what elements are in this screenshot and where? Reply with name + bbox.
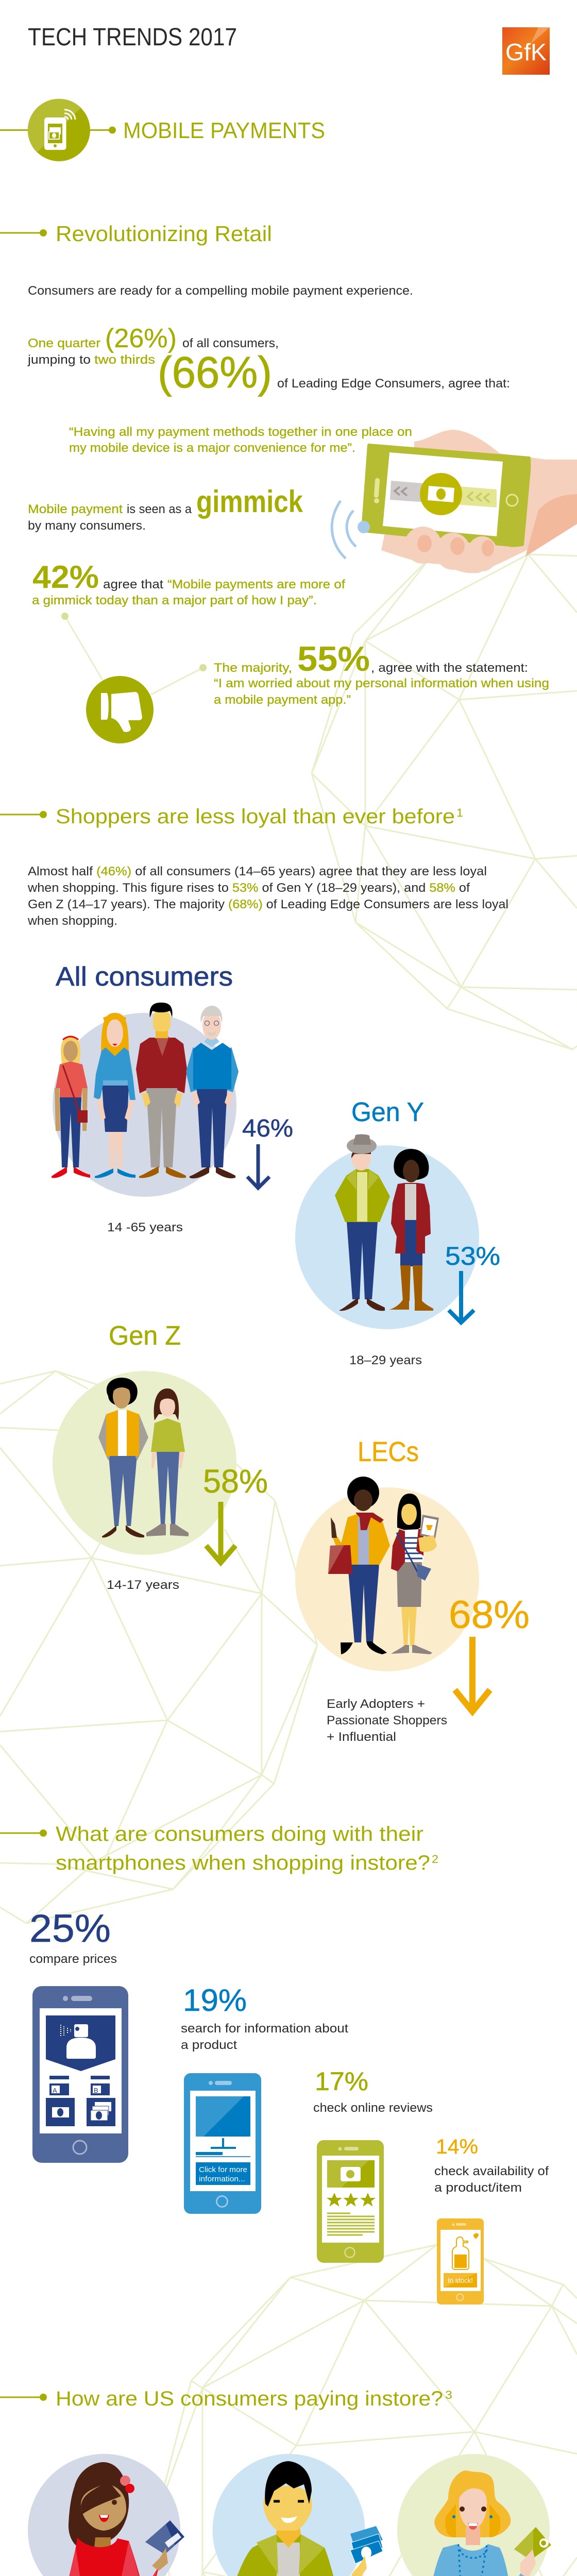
heading: LECs: LECs bbox=[358, 1436, 419, 1467]
panel: credit card payer bbox=[397, 2454, 551, 2576]
stat: 42%: agree that bbox=[103, 578, 163, 591]
logo: GfK bbox=[502, 27, 550, 75]
stat: 55%: , agree with the statement: bbox=[371, 661, 528, 675]
stat: 19% search: search for information about bbox=[181, 2022, 348, 2036]
quote: payment methods convenience: “Having all my payment methods together in one place on bbox=[69, 425, 412, 439]
label: ages: 18–29 years bbox=[349, 1353, 422, 1367]
panel: cash payer bbox=[212, 2454, 383, 2576]
logo: GfK: GfK bbox=[505, 39, 547, 65]
heading: all consumers: All consumers bbox=[56, 962, 233, 992]
heading: how are US consumers paying: 3 bbox=[445, 2388, 452, 2401]
stat: 17% reviews: 17% bbox=[315, 2067, 368, 2096]
label: ages: 14 -65 years bbox=[107, 1221, 183, 1234]
icon: phone comparing prices: A bbox=[53, 2087, 57, 2094]
panel: gen z bbox=[53, 1321, 268, 1592]
text: gimmick: by many consumers. bbox=[28, 519, 146, 533]
paragraph: loyalty bbox=[27, 865, 508, 928]
arrow: 53% bbox=[449, 1271, 474, 1323]
quote: payment methods convenience: my mobile device is a major convenience for me”. bbox=[69, 441, 355, 455]
label: segment definition bbox=[327, 1697, 447, 1744]
paragraph: loyalty: when shopping. This figure rises to 53% of Gen Y (18–29 years), and 58% of bbox=[27, 881, 470, 895]
stat text: 26% and 66% bbox=[27, 324, 510, 397]
stat: 14% availability: 14% bbox=[436, 2136, 478, 2158]
icon: phone comparing prices bbox=[32, 1986, 128, 2163]
figure: woman with phone bbox=[391, 1494, 439, 1654]
stat: 25% compare prices: 25% bbox=[29, 1907, 111, 1951]
figure: woman with long hair bbox=[94, 1013, 135, 1178]
heading: gen z: Gen Z bbox=[109, 1321, 181, 1351]
stat: 53%: 53% bbox=[445, 1242, 500, 1270]
stat: 14% availability: check availability of bbox=[434, 2164, 549, 2178]
icon: thumbs down with connectors bbox=[61, 613, 207, 743]
figure: girl in green top bbox=[146, 1388, 189, 1536]
label: segment definition: Passionate Shoppers bbox=[327, 1714, 447, 1727]
icon: signal waves and blue dot bbox=[332, 501, 370, 558]
heading: how are US consumers paying: How are US consumers paying instore? bbox=[56, 2387, 443, 2410]
quote: payment methods convenience bbox=[69, 425, 412, 455]
stat: 14% availability: a product/item bbox=[434, 2181, 522, 2195]
stat: 55% bbox=[214, 639, 549, 707]
heading: smartphones instore: What are consumers doing with their bbox=[56, 1823, 423, 1845]
label: segment definition: Early Adopters + bbox=[327, 1697, 425, 1711]
stat: 55%: 55% bbox=[297, 639, 370, 679]
icon: phone comparing prices: B bbox=[94, 2087, 98, 2094]
figure: woman in red cardigan bbox=[389, 1149, 433, 1311]
heading: shoppers less loyal: 1 bbox=[456, 806, 463, 819]
icon: phone with reviews bbox=[317, 2140, 384, 2263]
text: gimmick: is seen as a bbox=[127, 502, 192, 516]
arrow: 68% bbox=[455, 1637, 490, 1711]
stat: 14% availability bbox=[434, 2136, 549, 2195]
icon: mobile payments phone bbox=[0, 99, 116, 161]
panel: debit card payer bbox=[28, 2454, 184, 2576]
heading: smartphones instore bbox=[0, 1823, 438, 1874]
stat: 68%: 68% bbox=[449, 1593, 530, 1637]
stat: 42%: 42% bbox=[32, 560, 99, 595]
icon: phone with product info: Click for more bbox=[199, 2165, 247, 2174]
paragraph: loyalty: Almost half (46%) of all consumers (14–65 years) agree that they are less loyal bbox=[28, 865, 487, 878]
figure: woman with debit card bbox=[63, 2462, 184, 2576]
paragraph: loyalty: Gen Z (14–17 years). The majority (68%) of Leading Edge Consumers are less loyal bbox=[28, 897, 508, 911]
stat: 42%: “Mobile payments are more of bbox=[167, 578, 345, 591]
stat: 55%: The majority, bbox=[214, 661, 292, 675]
heading: revolutionizing retail: Revolutionizing Retail bbox=[56, 222, 272, 246]
panel: gen y bbox=[295, 1097, 500, 1367]
illustration: hand holding phone bbox=[363, 430, 577, 573]
stat: 55%: a mobile payment app.” bbox=[214, 693, 351, 707]
panel: leading edge consumers bbox=[295, 1436, 530, 1744]
heading: shoppers less loyal: Shoppers are less loyal than ever before bbox=[56, 805, 455, 828]
stat: 19% search: a product bbox=[181, 2038, 237, 2052]
stat: 58%: 58% bbox=[203, 1463, 268, 1500]
stat text: 26% and 66%: (26%) bbox=[105, 324, 177, 353]
heading: smartphones instore: 2 bbox=[432, 1853, 438, 1866]
figure: man with hat bbox=[335, 1134, 390, 1311]
stat text: 26% and 66%: of all consumers, bbox=[182, 336, 279, 350]
paragraph: loyalty: when shopping. bbox=[27, 914, 117, 928]
stat text: 26% and 66%: (66%) bbox=[158, 348, 272, 397]
stat: 19% search bbox=[181, 1983, 348, 2052]
figure: woman with credit card bbox=[427, 2470, 551, 2576]
figure: girl bbox=[52, 1036, 90, 1178]
arrow: 46% bbox=[247, 1144, 269, 1188]
heading: smartphones instore: smartphones when shopping instore? bbox=[56, 1852, 430, 1874]
figure: man with cash bbox=[232, 2461, 383, 2576]
label: segment definition: + Influential bbox=[327, 1730, 396, 1744]
stat: 25% compare prices: compare prices bbox=[29, 1952, 117, 1966]
text: gimmick: Mobile payment bbox=[28, 502, 123, 516]
stat: 17% reviews bbox=[313, 2067, 433, 2115]
stat text: 26% and 66%: One quarter bbox=[28, 336, 100, 350]
figure: man with shopping bag bbox=[328, 1477, 390, 1654]
panel: all consumers bbox=[52, 962, 293, 1234]
text: gimmick bbox=[28, 484, 303, 533]
text: gimmick: gimmick bbox=[196, 484, 303, 519]
stat: 25% compare prices bbox=[29, 1907, 117, 1966]
stat: 19% search: 19% bbox=[183, 1983, 247, 2018]
heading: gen y: Gen Y bbox=[351, 1097, 424, 1127]
icon: phone with product info bbox=[184, 2073, 261, 2214]
background polyhedron wireframes bbox=[0, 521, 577, 2576]
figure: girl in yellow vest bbox=[98, 1378, 148, 1537]
stat: 42% bbox=[32, 560, 345, 607]
heading: mobile payments: MOBILE PAYMENTS bbox=[123, 118, 325, 143]
icon: phone with in stock: In stock! bbox=[448, 2276, 473, 2284]
stat text: 26% and 66%: jumping to bbox=[27, 353, 91, 367]
icon: phone with in stock bbox=[437, 2218, 484, 2304]
figure: man in red bbox=[136, 1003, 187, 1178]
intro text: Consumers are ready for a compelling mobile payment experience. bbox=[28, 284, 413, 298]
stat: 46%: 46% bbox=[242, 1115, 293, 1142]
stat text: 26% and 66%: of Leading Edge Consumers, agree that: bbox=[277, 377, 510, 391]
stat text: 26% and 66%: two thirds bbox=[94, 353, 155, 367]
figure: older man bbox=[186, 1006, 239, 1178]
icon: phone with product info: information... bbox=[199, 2175, 245, 2183]
title: TECH TRENDS 2017 bbox=[28, 24, 237, 51]
stat: 42%: a gimmick today than a major part of how I pay”. bbox=[32, 594, 317, 607]
arrow: 58% bbox=[206, 1502, 235, 1563]
stat: 17% reviews: check online reviews bbox=[313, 2101, 433, 2115]
stat: 55%: “I am worried about my personal information when using bbox=[214, 676, 549, 690]
label: ages: 14-17 years bbox=[107, 1578, 179, 1592]
